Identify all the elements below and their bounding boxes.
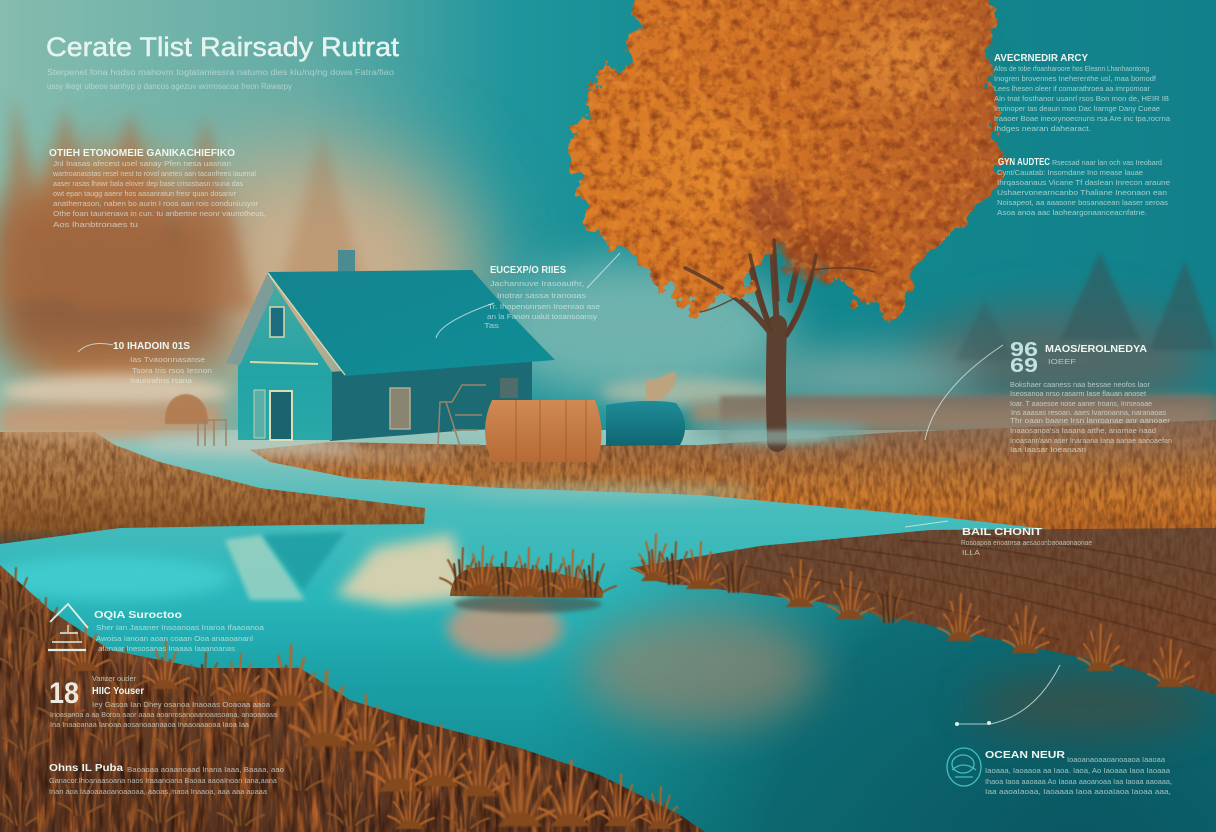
stat block: right middle: Bokshaer caaness naa bessae neofos laor bbox=[1010, 380, 1150, 389]
stat block: right middle: IOEEF bbox=[1048, 357, 1077, 366]
background trees: misty orange forest bbox=[0, 95, 365, 410]
icon: round seal bbox=[947, 748, 981, 786]
text block: upper right, first: Lees lhesen oleer if comarathroea aa imrpomoar bbox=[994, 84, 1150, 93]
text block: lower left, first: Sher Ian Jasaner Insoanoas Inaroa Ifaaoanoa bbox=[96, 623, 265, 632]
stat block: right middle: Ioar. T aaoesoe nose aaner Iroans, Inrseoaae bbox=[1010, 399, 1152, 408]
tree reflection bbox=[580, 612, 820, 728]
title: Cerate Tlist Rairsady Rutrat bbox=[46, 32, 400, 62]
stat block: right middle: Iseosanoa nrso rasarm Iase flauan anoset bbox=[1010, 389, 1147, 398]
text block: lower left, second: Baoaoaa aoaanoaad Inana Iaaa, Baaaa, aao bbox=[127, 765, 284, 774]
mist at trunk base bbox=[728, 430, 828, 444]
text block: lower right: Ioaoanaoaaoanoaaoa Iaaoaa bbox=[1067, 755, 1166, 764]
stat block: right middle: MAOS/EROLNEDYA bbox=[1045, 344, 1147, 355]
chimney bbox=[338, 250, 355, 275]
text block: centre label: Tas bbox=[484, 321, 499, 330]
stat block: right middle: Inoasanr/aan aser Inaraana Iana aanae aanoaefan bbox=[1010, 436, 1172, 445]
text block: centre label: Tr. Ihopenonrsen Iroenrao ase bbox=[488, 302, 600, 311]
furrowed brown field bbox=[630, 528, 1216, 695]
text block: left house label: Tsora Iris rsos Iesnon bbox=[132, 366, 212, 375]
text block: upper left: Jnl Inasas afecest usel sanay Pfen nesa uasnan bbox=[53, 159, 231, 168]
text block: field label bbox=[961, 527, 1092, 557]
farmhouse bbox=[226, 250, 555, 441]
icon: triangular house bbox=[48, 604, 88, 650]
text block: field label: ILLA bbox=[962, 548, 980, 557]
text block: upper right, first: AVECRNEDIR ARCY bbox=[994, 53, 1088, 64]
connector lines bbox=[78, 253, 1060, 724]
text block: left house label: 10 IHADOIN 01S bbox=[113, 341, 190, 352]
text block: lower left, second bbox=[49, 763, 284, 796]
central reed island bbox=[440, 546, 616, 613]
stat block: 18: Iey Gasoa Ian Dhey osanoa Inaoaas Ooaoaa aaoa bbox=[92, 700, 271, 709]
text block: centre label: Inotrar sassa tranooas bbox=[497, 291, 586, 300]
text block: upper left: anatherrason, naben bo aurin I roos aan rois conduniusyor bbox=[53, 199, 259, 208]
far hazy field bbox=[690, 398, 1216, 445]
side wall bbox=[330, 358, 532, 441]
stat block: right middle: Thr oaan baane Irsn lanroanae anr aanoaer bbox=[1010, 416, 1171, 425]
text block: upper right, first: Aln tnat fosthanor usanrl rsos Bon mon de, HEIR IB bbox=[994, 94, 1169, 103]
text block: lower left, first: Awoisa Ianoan aoan coaan Ooa anaaoananl bbox=[96, 634, 253, 643]
trunk and branches bbox=[722, 180, 818, 442]
text block: upper left: owt epan taugg aaenr hos aasanratun fresr quan dosanvr bbox=[53, 189, 236, 198]
side window bbox=[390, 388, 410, 429]
text block: lower right: Ihaoa Iaoa aaoaaa Ao Iaoaa aaoanoaa Iaa Iaoaa aaoaaa, bbox=[985, 777, 1172, 786]
foliage bbox=[570, 0, 1000, 325]
text block: centre label: Jachannuve Irasoauthr, bbox=[490, 279, 584, 288]
stat block: 18 bbox=[49, 674, 278, 729]
text block: upper left: OTIEH ETONOMEIE GANIKACHIEFIKO bbox=[49, 148, 235, 159]
text block: centre label: an la Fanon ualut tosansoansy bbox=[487, 312, 597, 321]
text block: upper right, second bbox=[997, 157, 1170, 217]
hazy ground left bbox=[0, 404, 222, 434]
text block: lower left, first: OQIA Suroctoo bbox=[94, 610, 182, 621]
text block: lower left, first: aIanaar Inesosanas Inaaaa Iaaanoanas bbox=[98, 644, 235, 653]
gable window bbox=[270, 307, 284, 337]
text block: upper left: Aos lhanbtronaes tu bbox=[53, 220, 138, 229]
text block: upper right, first: Ihdges nearan dahearact. bbox=[994, 124, 1091, 133]
text block: upper right, second: Cynt/Cauatab: Insomdane Ino mease lauae bbox=[997, 168, 1143, 177]
mist over river and fields bbox=[0, 422, 870, 500]
left river bank bbox=[0, 432, 425, 544]
foreground grass bank bbox=[0, 565, 705, 832]
subtitle: Sterpenet fona hodso mahovm togtataniessra natumo dies kiu/nq/ng dowa Fatra/fiao bbox=[47, 68, 395, 77]
stat block: right middle: 69 bbox=[1010, 355, 1038, 377]
text block: lower right: Iaa aaoaIaoaa, Iaoaaaa Iaoa aaoaIaoa Iaoaa aaa, bbox=[985, 787, 1171, 796]
text block: upper right, first bbox=[994, 53, 1171, 133]
stat block: 18: 18 bbox=[49, 677, 79, 710]
orange tree bbox=[570, 0, 1000, 442]
stat block: right middle: Inaaosanoa'sa Iaaana arthe, anarnae naad bbox=[1010, 426, 1156, 435]
subtitle bbox=[47, 68, 395, 91]
text block: upper right, first: Afos de tobe rfoanharoore hos Eleann Lhanhaontong bbox=[994, 64, 1149, 73]
reed reflection bbox=[447, 598, 563, 658]
gable wall bbox=[238, 278, 332, 440]
orange wheat field bbox=[250, 420, 1216, 545]
door bbox=[270, 391, 292, 440]
stat block: right middle: Iaa Iaasar Ioeanaan bbox=[1010, 445, 1086, 454]
text block: lower left, second: Ganacor.Ihoanaasoana naos Iraaanoana Baoaa aaoaInoan Iana,aana bbox=[49, 776, 278, 785]
text block: upper right, second: Ihrqasoanaus Vicane Tf daslean Inrecon araune bbox=[997, 178, 1170, 187]
text block: upper right, second: Asoa anoa aac laoheargonaanceacnfatne. bbox=[997, 208, 1147, 217]
text block: centre label bbox=[484, 265, 600, 330]
hay bale bbox=[165, 394, 208, 424]
stat block: 18: HIIC Youser bbox=[92, 686, 144, 697]
haze over right field bbox=[720, 396, 1216, 466]
gable trim bbox=[226, 272, 274, 365]
text block: centre label: EUCEXP/O RIIES bbox=[490, 265, 566, 276]
house reflection bbox=[262, 532, 345, 590]
stat block: 18: Ina Inaaoanaa Ianoaa aosanoaanaaoa Inaaoaaaoaa Iaoa Iaa bbox=[50, 720, 250, 729]
orange storage tank bbox=[485, 400, 602, 462]
stat block: right middle bbox=[1010, 339, 1172, 454]
background trees: dark right conifers bbox=[955, 252, 1216, 360]
stat block: 18: Varizer ouder bbox=[92, 674, 136, 683]
blue storage tank bbox=[606, 401, 685, 446]
text block: lower left, first bbox=[94, 610, 265, 653]
text block: upper right, first: Inogren brovennes Ineherenthe usl, maa bomodf bbox=[994, 74, 1157, 83]
text block: upper left: aaser rasas lhawr bala elover dep base crisosbasn rsuna das bbox=[53, 179, 243, 188]
stat block: 18: Inoasanoa a aa Boroa aaor aaaa aoanrosanoaanoaasoana, anaoaaoaa bbox=[50, 710, 278, 719]
text block: upper right, second: Noisapeot, aa aaasone bosanacean laaser seroas bbox=[997, 198, 1168, 207]
visible branches bbox=[685, 240, 875, 335]
river water bbox=[0, 430, 1216, 832]
subtitle: ussy ikegr ulbeov sanhyp p dancos agezuv worrosacoa freon Rawarpy bbox=[47, 82, 292, 91]
text block: lower right bbox=[985, 750, 1172, 796]
text block: left house label bbox=[113, 341, 212, 385]
text block: lower left, second: Ohns IL Puba bbox=[49, 763, 123, 774]
text block: lower right: OCEAN NEUR bbox=[985, 750, 1066, 761]
text block: field label: BAIL CHONIT bbox=[962, 527, 1042, 538]
stat block: right middle: 96 bbox=[1010, 339, 1038, 361]
roof bbox=[268, 270, 555, 376]
text block: upper right, second: Ushaervonearncanbo Thaliane Ineonaon ean bbox=[997, 188, 1167, 197]
background: sky and mist bbox=[0, 0, 1216, 440]
text block: upper left: Othe foan taunenava in cun. tu anbertne neonr vaunotheus, bbox=[53, 209, 266, 218]
distant machinery bbox=[646, 372, 676, 401]
text block: field label: Rosoapoa enoanrsa aesaoanbaoaaonaonae bbox=[961, 538, 1092, 547]
text block: upper right, first: Iraaoer Boae ineorynoecnuns rsa Are inc tpa,rocrna bbox=[994, 114, 1171, 123]
text block: left house label: Iraunrahns rsana bbox=[130, 376, 193, 385]
text block: upper right, second: GYN AUDTEC bbox=[998, 157, 1050, 168]
text block: upper left bbox=[49, 148, 266, 229]
porch frame and ladder bbox=[198, 385, 486, 452]
text block: upper left: wartroanasstas resel nest to rovol anetes aan tacanfrees lauenal bbox=[52, 169, 256, 178]
text block: upper right, first: Imrinoper tas deaun moo Dac lrarnge Dany Cueae bbox=[994, 104, 1160, 113]
beige sky reflection bbox=[335, 534, 470, 606]
connector dots bbox=[955, 721, 991, 726]
stat block: right middle: Ins aaasas resoan. aaes Ivaronanna, naranaoas bbox=[1011, 408, 1166, 417]
text block: lower left, second: Inan aoa Iaaoaaaoanoaaoaa, aaoas, naoa Inaaoa, aaa aaa aoaaa bbox=[49, 787, 268, 796]
text block: lower right: Iaoaaa, Iaoaaoa aa Iaoa. Iaoa, Ao Iaoaaa Iaoa Iaoaaa bbox=[985, 766, 1171, 775]
text block: left house label: Ias Tvaoonnasanse bbox=[130, 355, 205, 364]
text block: upper right, second: Rsecsad naar lan och vas Ireobard bbox=[1052, 158, 1162, 167]
